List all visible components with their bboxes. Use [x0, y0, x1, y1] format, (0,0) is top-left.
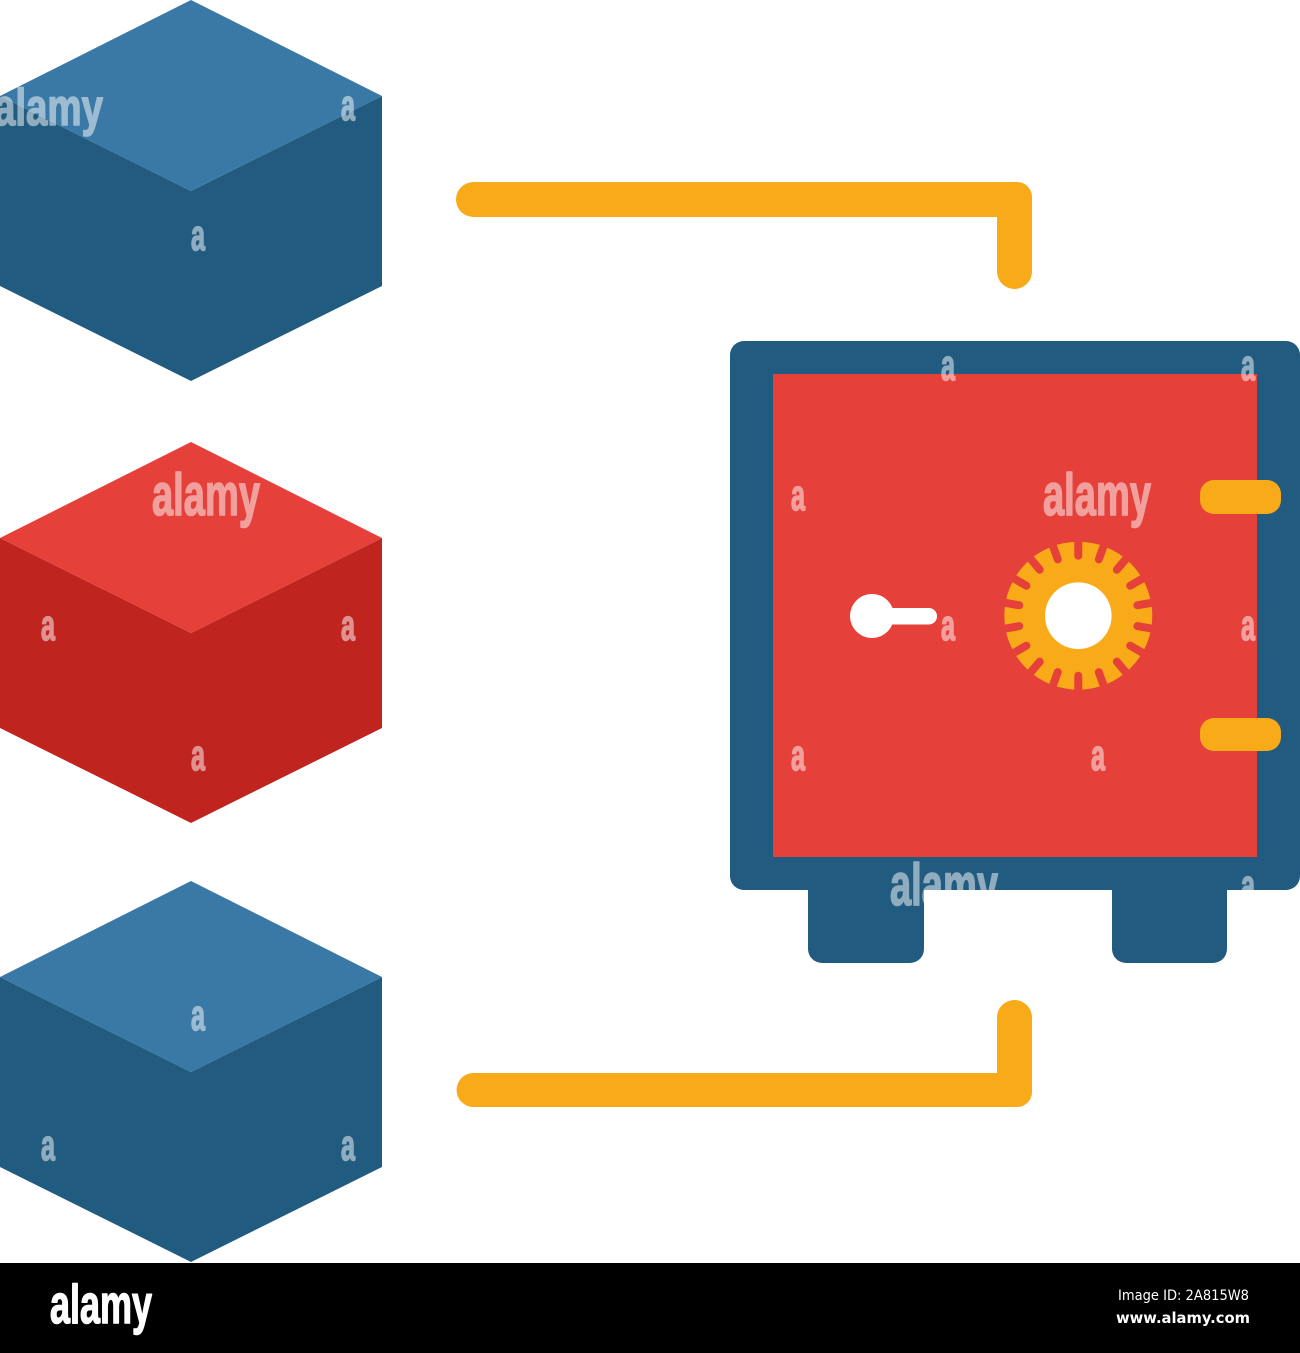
footer logo: alamy: [50, 1273, 152, 1335]
icon: middle red cube: [0, 442, 382, 823]
watermarks: a: [941, 601, 955, 650]
watermarks: a: [1241, 341, 1255, 390]
watermarks: alamy: [152, 462, 260, 528]
watermarks: [0, 79, 1255, 1170]
watermarks: a: [191, 211, 205, 260]
watermarks: a: [1241, 601, 1255, 650]
watermarks: a: [1241, 861, 1255, 910]
icon: bottom blue cube: [0, 881, 382, 1262]
watermarks: a: [191, 991, 205, 1040]
watermarks: a: [941, 341, 955, 390]
watermarks: a: [341, 81, 355, 130]
watermarks: a: [1091, 731, 1105, 780]
watermarks: a: [791, 471, 805, 520]
footer bar: [0, 1263, 1300, 1353]
icon: top blue cube: [0, 0, 382, 381]
arrow: bottom connector to safe: [457, 1000, 1032, 1107]
arrow: top connector to safe: [456, 182, 1032, 289]
watermarks: a: [41, 601, 55, 650]
top hinge: [1200, 480, 1281, 514]
icon: safe: [730, 341, 1300, 963]
website: www.alamy.com: [1116, 1309, 1250, 1327]
keyhole: [850, 594, 937, 638]
watermarks: alamy: [890, 852, 998, 918]
watermarks: alamy: [1043, 462, 1151, 528]
safe feet: [808, 880, 1227, 963]
bottom hinge: [1200, 718, 1281, 751]
watermarks: a: [791, 731, 805, 780]
image id: Image ID: 2A815W8: [1118, 1288, 1249, 1304]
watermarks: a: [41, 1121, 55, 1170]
watermarks: a: [191, 731, 205, 780]
combination dial: [1000, 536, 1157, 696]
watermarks: a: [341, 1121, 355, 1170]
safe door: [773, 374, 1257, 857]
safe body: [730, 341, 1300, 890]
watermarks: a: [341, 601, 355, 650]
